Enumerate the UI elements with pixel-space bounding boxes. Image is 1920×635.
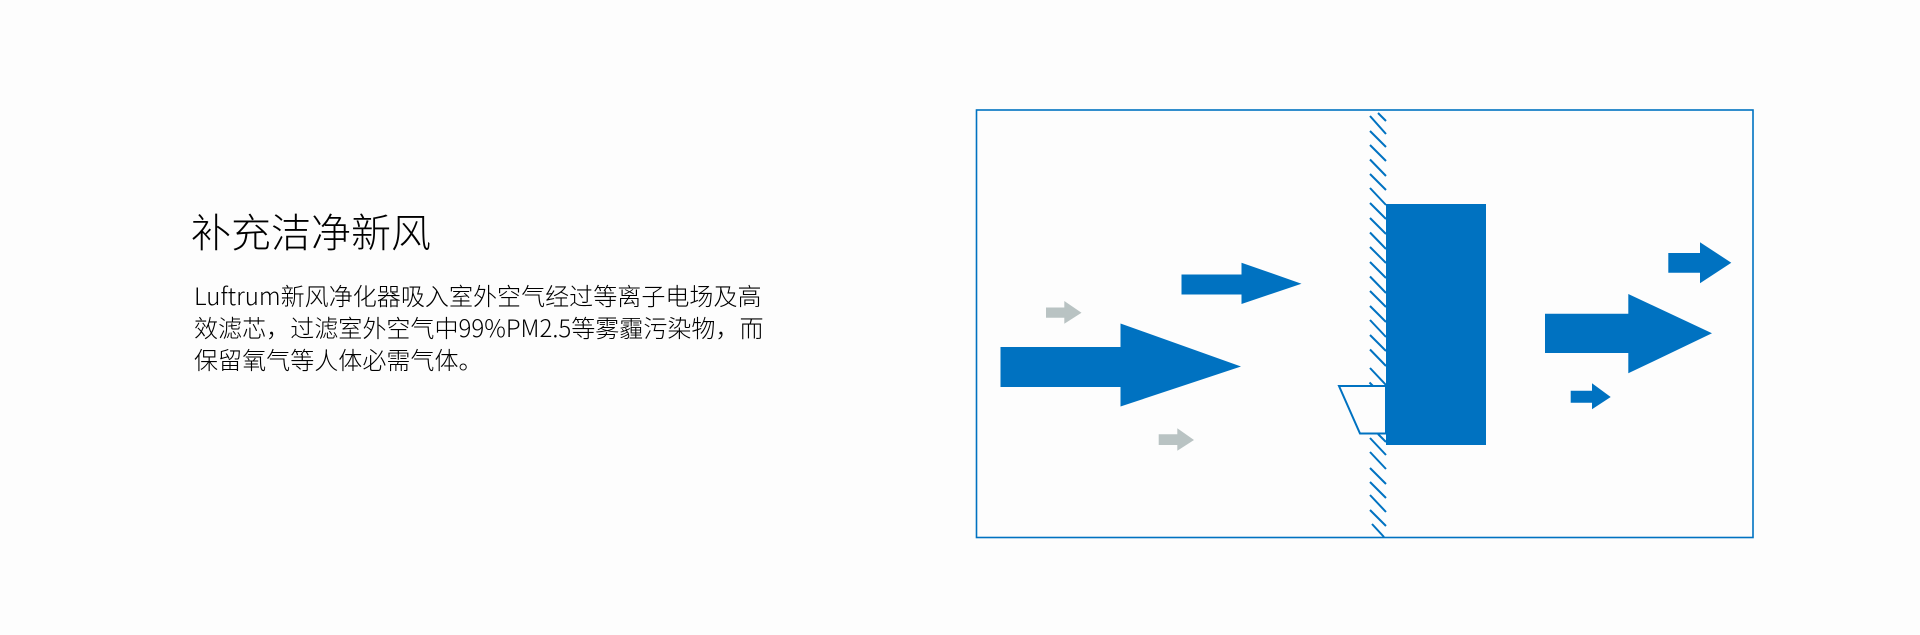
arrow: large clean air [1545, 294, 1712, 373]
title: 补充洁净新风 [191, 201, 431, 259]
wall hatching [1370, 113, 1386, 537]
arrow: large outdoor air [1000, 324, 1241, 406]
arrow: medium outdoor air [1182, 263, 1302, 304]
arrow: grey pollutant lower [1159, 428, 1194, 451]
arrow: grey pollutant upper [1046, 301, 1082, 324]
arrow: upper clean air [1668, 242, 1731, 283]
room outline [976, 110, 1753, 538]
description text [194, 277, 764, 376]
purifier unit intake trapezoid [1339, 386, 1386, 434]
purifier unit block [1386, 204, 1486, 445]
description text: 效滤芯，过滤室外空气中99%PM2.5等雾霾污染物，而 [194, 309, 764, 344]
description text: Luftrum新风净化器吸入室外空气经过等离子电场及高 [194, 277, 762, 312]
arrow: small clean air [1571, 383, 1611, 409]
description text: 保留氧气等人体必需气体。 [194, 341, 483, 376]
